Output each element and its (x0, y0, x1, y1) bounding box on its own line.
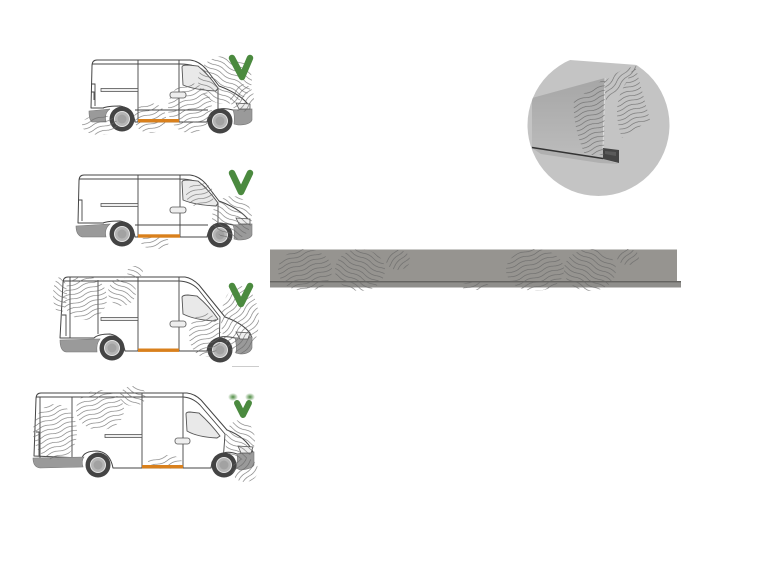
orange sill panel (138, 234, 180, 238)
wavy hatch right (617, 65, 650, 138)
panel edge highlight (603, 78, 605, 148)
door handle (175, 438, 190, 444)
long repair panel photo (270, 249, 681, 291)
side rub strip (101, 318, 138, 320)
headlight (236, 103, 250, 109)
wavy hatch overlay (141, 183, 252, 249)
van 3: long wheelbase with orange sill (53, 266, 259, 367)
front wheel (208, 222, 232, 248)
green check mark (232, 286, 250, 304)
rear bumper (33, 457, 84, 468)
front wheel (208, 108, 232, 134)
rear bumper (76, 224, 110, 237)
side rub strip (101, 88, 138, 92)
front wheel (208, 338, 232, 362)
cab window (182, 65, 218, 91)
orange sill panel (138, 119, 179, 122)
channel opening (603, 148, 619, 163)
wavy hatch left (574, 78, 605, 155)
dark fold line (270, 281, 681, 282)
rear wheel (86, 452, 110, 478)
white top cut (525, 50, 672, 74)
orange sill panel (138, 348, 179, 352)
green check mark (237, 403, 249, 415)
door handle (170, 207, 186, 213)
front bumper (233, 109, 252, 125)
wavy hatch overlay (278, 249, 639, 291)
wavy hatch overlay (33, 386, 258, 482)
side rub strip (105, 434, 142, 438)
van 1: short wheelbase with orange sill (82, 56, 254, 135)
rear wheel (110, 106, 134, 132)
cab window (182, 295, 218, 321)
front bumper (235, 337, 252, 354)
rear wheel (100, 336, 124, 360)
dark fold line (532, 148, 603, 158)
orange sill panel (142, 465, 183, 468)
wavy hatch top (604, 66, 637, 100)
cab window (182, 180, 218, 206)
rear wheel (110, 222, 134, 246)
rear bumper (89, 109, 110, 122)
front bumper (233, 224, 252, 240)
headlight (236, 218, 250, 224)
grey circle background (528, 54, 670, 196)
panel face (532, 78, 605, 158)
circular detail photo of panel profile (528, 60, 670, 196)
door handle (170, 92, 186, 98)
green check mark (232, 173, 250, 192)
underline mark (232, 366, 259, 367)
door handle (170, 321, 186, 327)
rear bumper (60, 339, 100, 352)
cab window (186, 412, 220, 438)
infographic canvas (32, 54, 681, 482)
panel face (270, 250, 677, 282)
side rub strip (101, 204, 138, 206)
green check mark (232, 58, 250, 77)
flange lip (270, 282, 681, 288)
headlight (238, 446, 253, 453)
wavy hatch overlay (53, 266, 259, 357)
front bumper (236, 452, 254, 470)
van 4: extended body with orange sill (33, 386, 258, 482)
headlight (236, 332, 250, 339)
wavy hatch overlay (82, 56, 254, 135)
channel interior (605, 151, 616, 156)
van 2: medium length with orange sill (76, 173, 252, 249)
lower lip (532, 148, 619, 164)
blurred green marks (228, 393, 255, 401)
front wheel (212, 452, 236, 478)
